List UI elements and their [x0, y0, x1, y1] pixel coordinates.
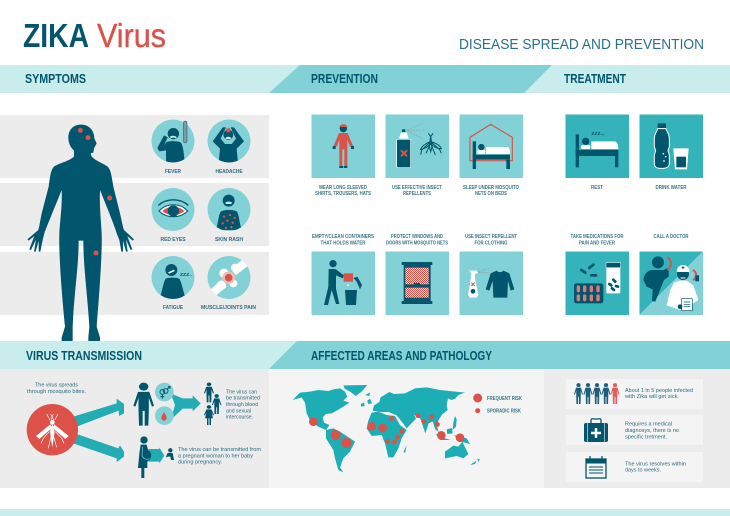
icon: mosquito	[27, 404, 78, 455]
fact: medical diagnosis: Requires a medical	[625, 422, 672, 428]
icon: sexual transmission	[155, 383, 174, 401]
icons: other people	[204, 382, 221, 425]
icon: red eyes	[152, 188, 194, 231]
icon: bed under mosquito net	[470, 124, 512, 169]
prevention captions: USE EFFECTIVE INSECT	[392, 185, 442, 191]
icon: five people	[574, 383, 620, 404]
icon: emptying containers	[324, 260, 362, 305]
bottom band	[0, 509, 730, 516]
treatment captions	[570, 185, 689, 246]
icon: skin rash	[208, 188, 250, 231]
prevention captions: EMPTY/CLEAN CONTAINERS	[312, 234, 374, 240]
treatment captions: REST	[591, 185, 604, 191]
prevention captions: WEAR LONG SLEEVED	[319, 185, 367, 191]
panel: virus transmission	[27, 382, 261, 478]
icon: adult figure	[133, 383, 154, 426]
icon: window with mosquito net	[402, 262, 432, 304]
label: SKIN RASH	[215, 237, 243, 243]
panel: treatment icons	[566, 114, 703, 315]
prevention captions: FOR CLOTHING	[474, 240, 508, 246]
title: ZIKA	[23, 17, 89, 54]
arrow: mosquito to pregnant woman	[73, 434, 124, 462]
panel backgrounds: lower row	[0, 369, 730, 488]
fact: 1 in 5 people: with Zika will get sick.	[624, 394, 679, 400]
fact: 1 in 5 people: About 1 in 5 people infected	[625, 388, 693, 394]
prevention captions: DOORS WITH MOSQUITO NETS	[386, 240, 448, 246]
icon: blood drop	[155, 406, 174, 425]
text: mosquito bites: The virus spreads	[35, 382, 78, 388]
icon: bed rest: ZZZ...	[591, 131, 605, 137]
text: pregnancy: The virus can be transmitted from	[178, 447, 261, 453]
arrow: mosquito to people	[73, 399, 124, 427]
prevention captions: REPELLENTS	[403, 191, 431, 197]
text: mosquito bites	[27, 382, 86, 395]
title	[23, 17, 166, 54]
text: pregnancy: a pregnant woman to her baby	[178, 453, 253, 459]
icon: protective clothing	[333, 124, 354, 168]
icon: fever	[152, 120, 194, 163]
heading: virus transmission: VIRUS TRANSMISSION	[26, 348, 142, 363]
text: pregnancy: during pregnancy.	[178, 460, 222, 466]
treatment captions: TAKE MEDICATIONS FOR	[570, 234, 624, 240]
treatment captions: PAIN AND FEVER	[579, 240, 615, 246]
text: pregnancy	[178, 447, 261, 466]
prevention captions	[312, 185, 520, 246]
label: HEADACHE	[216, 169, 243, 175]
prevention captions: PROTECT WINDOWS AND	[391, 234, 443, 240]
treatment captions: DRINK WATER	[656, 185, 687, 191]
text: blood and intercourse: be transmitted	[226, 396, 260, 402]
label: FEVER	[165, 169, 181, 175]
label: RED EYES	[160, 237, 186, 243]
text: blood and intercourse: intercourse.	[226, 415, 253, 421]
title: Virus	[97, 17, 166, 54]
fact: duration	[566, 452, 703, 482]
text: mosquito bites: through mosquito bites.	[27, 389, 86, 395]
text: blood and intercourse: The virus can	[226, 390, 257, 396]
label: FATIGUE	[163, 305, 183, 311]
heading: symptoms: SYMPTOMS	[25, 72, 86, 86]
icon: repellent for clothing	[468, 269, 514, 298]
panel: symptoms backgrounds	[0, 115, 269, 315]
icon: bed rest	[576, 131, 618, 167]
arrow: to others	[171, 393, 201, 420]
icon: pregnant woman	[138, 436, 151, 478]
icon: medications	[574, 263, 621, 303]
map legend: FREQUENT RISK	[487, 396, 522, 402]
prevention captions: USE INSECT REPELLENT	[465, 234, 517, 240]
fact: duration: The virus resolves within	[625, 461, 686, 467]
icon: medical bag	[584, 419, 608, 442]
text: blood and intercourse: and sexual	[226, 408, 251, 414]
heading: treatment: TREATMENT	[564, 72, 626, 86]
map legend	[473, 394, 522, 415]
fact: medical diagnosis: specific tretment.	[625, 434, 667, 440]
section header band: symptoms, prevention, treatment	[0, 65, 730, 93]
label: MUSCLE/JOINTS PAIN	[201, 305, 256, 311]
section header band: transmission and affected areas	[0, 341, 730, 369]
icon: muscle and joints pain	[208, 256, 250, 299]
text: blood and intercourse	[226, 390, 260, 421]
icon: fatigue	[152, 256, 194, 299]
prevention captions: SHIRTS, TROUSERS, HATS	[315, 191, 371, 197]
map legend: SPORADIC RISK	[487, 409, 521, 415]
panel: prevention icons	[312, 114, 523, 315]
icon: fatigue: ZZZ..	[180, 272, 193, 278]
heading: affected areas: AFFECTED AREAS AND PATHOLOGY	[311, 348, 492, 363]
icon: calendar	[586, 456, 606, 478]
icon: insect repellent spray and mosquito	[397, 123, 441, 168]
text: blood and intercourse: through blood	[226, 402, 258, 408]
prevention captions: SLEEP UNDER MOSQUITO	[463, 185, 520, 191]
fact: 1 in 5 people	[566, 379, 703, 409]
icon: baby	[166, 448, 174, 460]
heading: prevention: PREVENTION	[311, 72, 378, 86]
icon: call a doctor	[643, 256, 699, 311]
prevention captions: THAT HOLDS WATER	[320, 240, 366, 246]
body figure with pain points	[27, 125, 134, 341]
arrow: mother to baby	[148, 447, 164, 463]
fact: medical diagnosis: diagnosys, there is no	[625, 428, 679, 434]
fact: medical diagnosis	[566, 415, 703, 445]
icon: headache	[208, 120, 250, 163]
treatment captions: CALL A DOCTOR	[654, 234, 689, 240]
prevention captions: NETS ON BEDS	[475, 191, 507, 197]
fact: duration: days to weeks.	[625, 468, 661, 474]
subtitle: DISEASE SPREAD AND PREVENTION	[459, 37, 704, 53]
icon: water bottle and glass	[654, 123, 689, 169]
world map	[293, 385, 480, 472]
